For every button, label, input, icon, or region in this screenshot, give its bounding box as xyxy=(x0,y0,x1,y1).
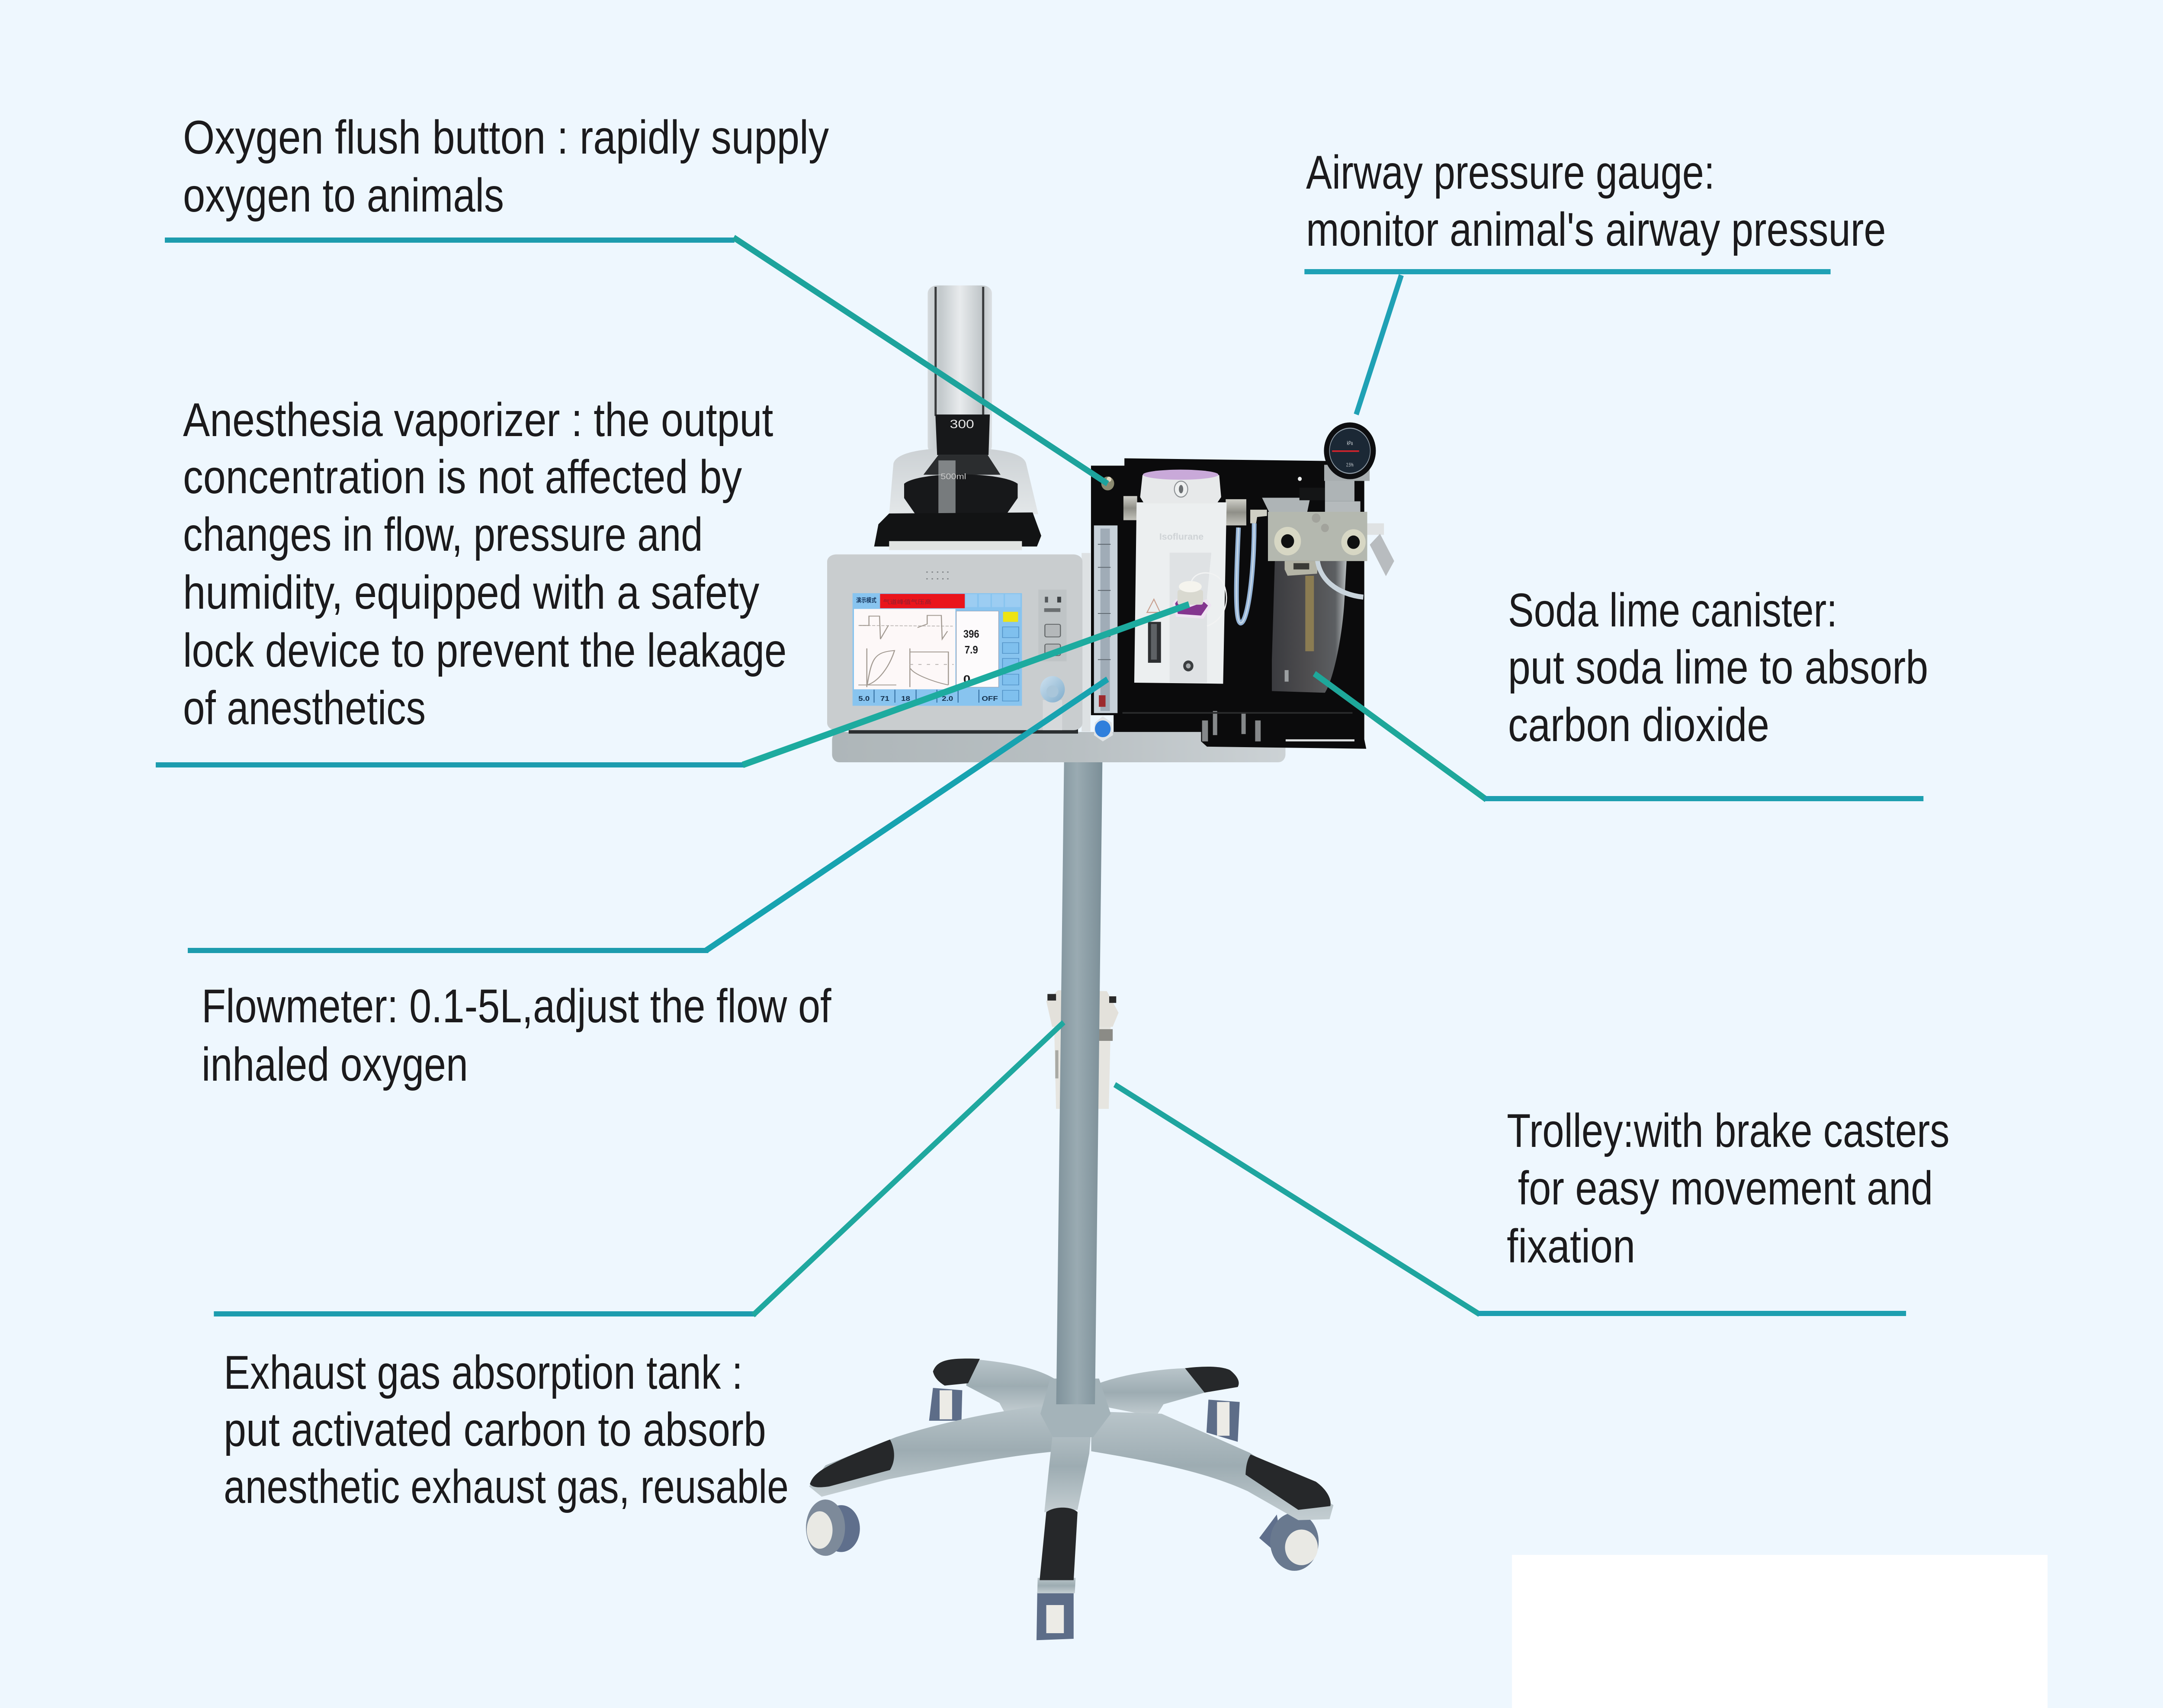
foot pads xyxy=(810,1358,1331,1580)
text: flowmeter xyxy=(202,980,831,1091)
leader line: airway pressure gauge xyxy=(1304,272,1831,414)
soda lime canister xyxy=(1272,561,1347,693)
leader line: soda lime canister xyxy=(1314,674,1923,799)
base arms xyxy=(809,1359,1333,1593)
text: oxygen flush button xyxy=(183,111,829,222)
airway pressure gauge: kPa xyxy=(1347,440,1353,446)
text: trolley: fixation xyxy=(1507,1220,1635,1273)
bottom settings bar: 18 xyxy=(901,695,910,702)
text: anesthesia vaporizer: lock device to prevent the leakage xyxy=(183,624,786,677)
text: airway pressure gauge: Airway pressure gauge: xyxy=(1306,146,1715,199)
shelf xyxy=(832,732,1285,762)
text: oxygen flush button: Oxygen flush button : rapidly supply xyxy=(183,111,829,164)
text: exhaust gas absorption tank xyxy=(224,1346,789,1513)
touch screen: 演示模式 xyxy=(856,597,876,604)
text: soda lime canister xyxy=(1508,584,1928,751)
airway pressure gauge: 2.5% xyxy=(1346,462,1354,468)
touch screen xyxy=(853,593,1022,706)
text: oxygen flush button: oxygen to animals xyxy=(183,169,504,222)
flowmeter xyxy=(1094,525,1117,742)
anesthesia panel xyxy=(1091,458,1394,749)
breathing tube xyxy=(1236,523,1254,623)
gas manifold block xyxy=(1262,488,1367,561)
text: airway pressure gauge xyxy=(1306,146,1886,256)
vaporizer: Isoflurane xyxy=(1159,532,1203,542)
illustration: anesthesia machine on trolley xyxy=(806,286,1394,1640)
vaporizer xyxy=(1123,470,1246,684)
text: anesthesia vaporizer: of anesthetics xyxy=(183,682,426,735)
text: soda lime canister: Soda lime canister: xyxy=(1508,584,1837,637)
oxygen flush button xyxy=(1101,477,1114,491)
leader line: oxygen flush button xyxy=(165,238,1107,484)
speaker holes xyxy=(926,571,949,579)
leader line: trolley xyxy=(1115,1085,1906,1314)
bracket posts xyxy=(1202,711,1261,742)
text: anesthesia vaporizer: concentration is not affected by xyxy=(183,451,742,504)
bottom settings bar xyxy=(858,690,998,703)
leader line: flowmeter xyxy=(188,679,1107,950)
text: trolley: for easy movement and xyxy=(1518,1162,1933,1215)
text: exhaust gas absorption tank: anesthetic exhaust gas, reusable xyxy=(224,1461,789,1513)
side control panel xyxy=(1038,590,1067,661)
leader line: exhaust gas absorption tank xyxy=(214,1022,1064,1315)
bottom settings bar: 2.0 xyxy=(942,695,953,702)
ventilator monitor xyxy=(827,553,1091,734)
control knob xyxy=(1040,676,1065,730)
bottom settings bar: 71 xyxy=(880,695,889,702)
bottom settings bar: OFF xyxy=(982,695,998,702)
readings xyxy=(963,628,979,685)
text: exhaust gas absorption tank: Exhaust gas absorption tank : xyxy=(224,1346,743,1399)
airway pressure gauge xyxy=(1324,422,1376,481)
text: flowmeter: inhaled oxygen xyxy=(202,1038,468,1091)
bottom settings bar: 5.0 xyxy=(858,695,870,702)
readings: 396 xyxy=(963,628,979,640)
leader line: anesthesia vaporizer xyxy=(156,604,1189,765)
waveforms xyxy=(858,615,953,687)
ventilator bellows: 500ml xyxy=(940,472,966,481)
text: anesthesia vaporizer: changes in flow, pressure and xyxy=(183,508,703,561)
side buttons xyxy=(1003,612,1018,622)
ventilator bellows xyxy=(874,286,1041,550)
text: anesthesia vaporizer xyxy=(183,394,786,735)
text: anesthesia vaporizer: Anesthesia vaporizer : the output xyxy=(183,394,773,446)
ventilator bellows: 300 xyxy=(950,417,974,431)
touch screen: 气道峰值气压高 xyxy=(883,599,931,606)
gauge stem xyxy=(1325,471,1354,501)
black back plate xyxy=(1091,458,1366,749)
readings: 0 xyxy=(963,673,970,685)
text: anesthesia vaporizer: humidity, equipped with a safety xyxy=(183,566,760,619)
text: trolley xyxy=(1507,1104,1950,1273)
text: trolley: Trolley:with brake casters xyxy=(1507,1104,1950,1157)
exhaust nozzle xyxy=(1367,523,1394,576)
text: airway pressure gauge: monitor animal's airway pressure xyxy=(1306,203,1886,256)
readings: 7.9 xyxy=(965,644,978,656)
text: soda lime canister: carbon dioxide xyxy=(1508,699,1769,751)
trolley stand and base xyxy=(806,990,1333,1640)
soda lime clear tube xyxy=(1317,555,1363,597)
white box bottom right xyxy=(1512,1555,2047,1708)
drug filler bottle xyxy=(1173,573,1226,626)
exhaust gas absorption tank xyxy=(1046,990,1119,1109)
casters xyxy=(806,1388,1319,1640)
text: exhaust gas absorption tank: put activated carbon to absorb xyxy=(224,1403,766,1456)
text: soda lime canister: put soda lime to absorb xyxy=(1508,641,1928,694)
text: flowmeter: Flowmeter: 0.1-5L,adjust the flow of xyxy=(202,980,831,1033)
pole xyxy=(1056,757,1102,1404)
